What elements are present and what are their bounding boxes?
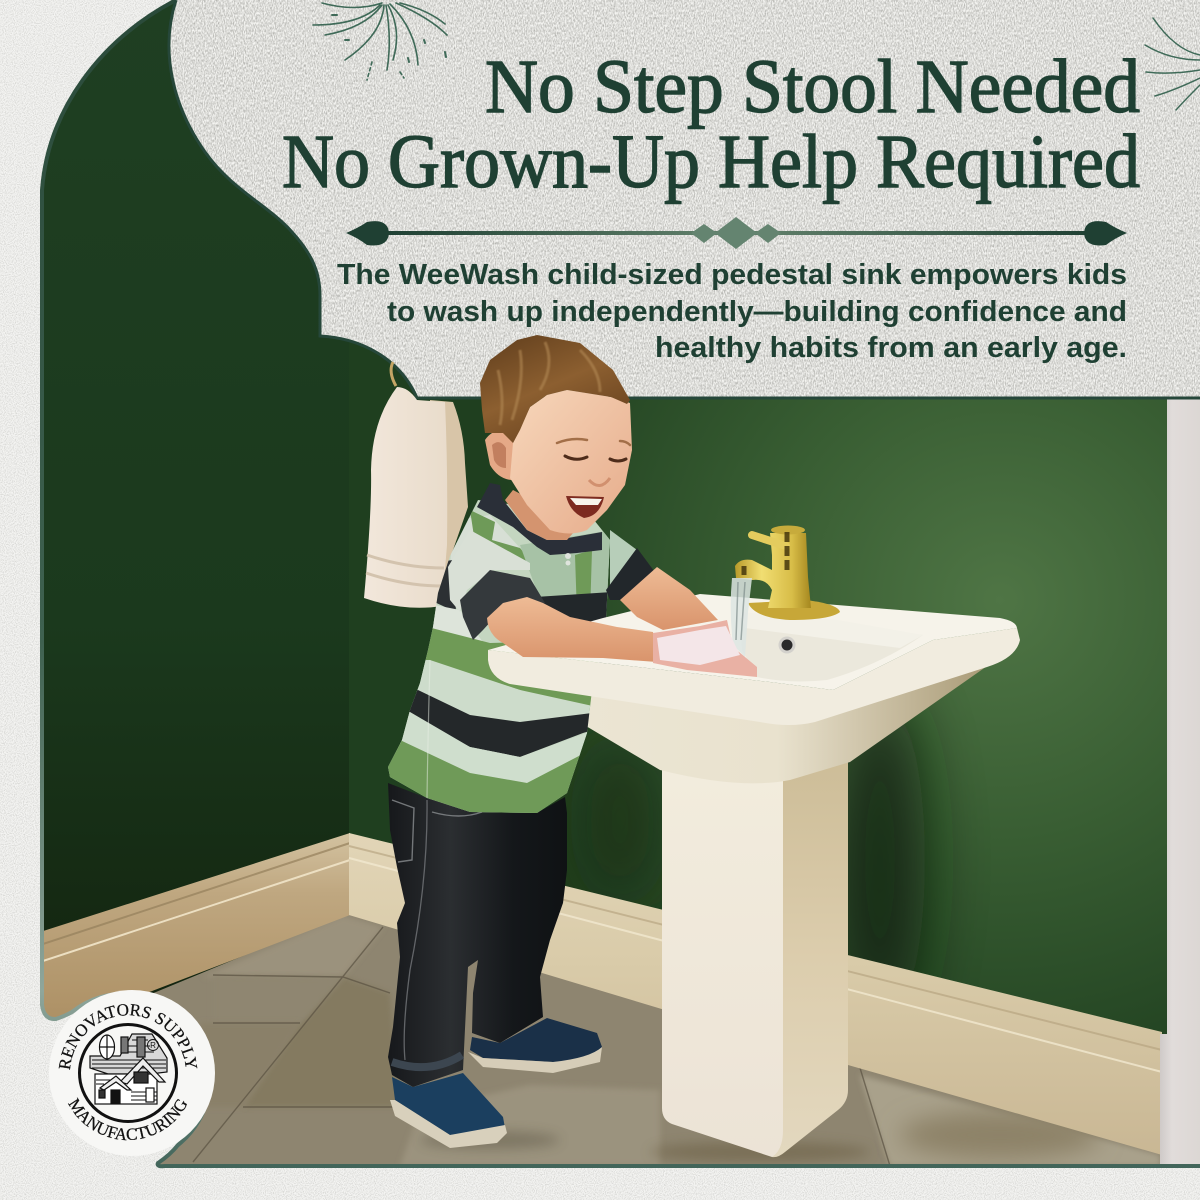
face [510,390,632,534]
towel [364,387,468,608]
overflow drain [778,636,796,654]
eyes and brows [557,439,630,461]
logo house [90,1034,167,1104]
logo text top: RENOVATORS SUPPLY [58,1004,198,1070]
boy lower body [380,490,620,1148]
jeans [388,783,567,1087]
subtitle line 3: healthy habits from an early age. [655,332,1127,364]
shoulder green stripe [470,511,526,561]
collar [477,483,602,555]
registered mark [148,1040,158,1050]
basin [740,618,923,681]
rim top surface [488,594,1017,690]
right baseboard [349,833,1162,1155]
pedestal side face [772,760,848,1157]
subtitle line 1: The WeeWash child-sized pedestal sink empowers kids [337,259,1127,291]
firework decoration left [313,3,447,80]
light stripe [395,712,600,783]
sink underside [517,664,990,783]
faucet handle [752,535,786,546]
faucet plate [748,600,840,620]
firework decoration right [1145,18,1200,110]
near sleeve [448,530,545,640]
rim front face [488,628,1020,725]
towel ring [391,362,396,386]
shoulder white stripe [450,515,520,560]
title line 2: No Grown-Up Help Required [282,120,1140,204]
right green wall [349,342,1167,1034]
faucet body [735,533,811,608]
logo badge [49,990,215,1156]
ornamental divider [346,217,1127,249]
floor tiles [154,915,1160,1164]
chest pale panel [520,530,612,600]
sink top [488,594,1020,725]
striped shirt [388,500,610,813]
shadow under sink on wall [570,704,958,978]
hair [480,335,630,443]
side dark stripe [436,560,456,610]
logo disc [49,990,215,1156]
far arm [620,567,718,630]
door frame right [1160,398,1200,1166]
placket [575,551,592,594]
pedestal floor shadow [650,1142,870,1162]
green stripe [426,628,598,711]
subtitle line 2: to wash up independently—building confidence and [387,296,1127,328]
title line 1: No Step Stool Needed [485,45,1140,129]
nose [589,478,610,486]
bottom green stripe [388,740,580,813]
right shoe [468,1018,602,1073]
header panel [160,0,1200,400]
faucet cap [771,526,805,534]
shoe floor shadow [420,1131,560,1149]
faucet reflections [744,532,787,575]
boy upper body [448,335,757,677]
neck [505,490,580,540]
pale stripe [416,660,590,722]
logo ring [80,1024,176,1122]
sink pedestal and underside [517,664,990,1157]
collar buttons [565,553,571,566]
soapy hands [653,620,757,677]
left shoe [390,1073,507,1148]
chest dark band [541,592,608,622]
ear [485,431,518,480]
water stream [731,578,752,657]
logo text bottom: MANUFACTURING [68,1097,187,1140]
dark stripe [400,690,600,757]
laughing mouth [566,496,604,518]
left baseboard [40,833,350,1034]
far sleeve [606,530,657,600]
white stripe [432,606,482,641]
near arm [487,597,657,662]
title [282,45,1140,204]
registered mark: R [150,1041,156,1050]
gold faucet [735,526,840,620]
basin back wall [741,612,923,648]
pedestal front face [662,770,783,1157]
subtitle [337,259,1127,364]
left green wall [40,0,350,1040]
